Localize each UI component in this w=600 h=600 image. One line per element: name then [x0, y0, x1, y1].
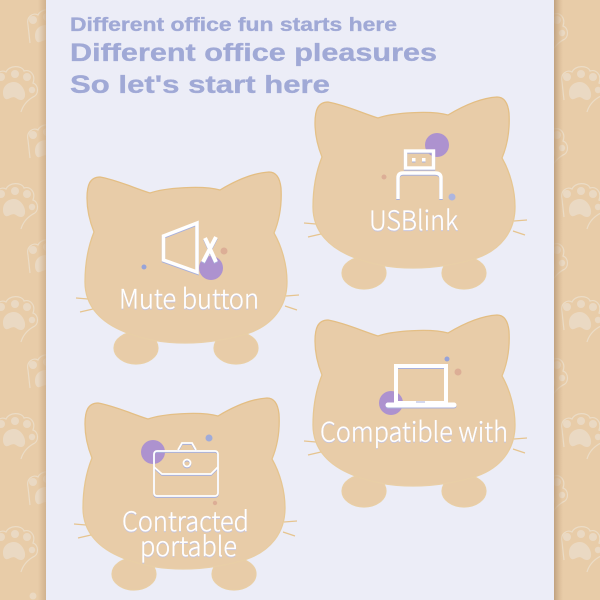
- subtitle line: Different office fun starts here: [70, 15, 397, 36]
- panel: contracted portable cat: [74, 398, 297, 590]
- icon: USB plug: [398, 151, 441, 199]
- decorative dots: [379, 356, 462, 415]
- label second line: portable: [140, 525, 237, 564]
- label: Contracted: [122, 500, 249, 539]
- panel: mute button cat: [76, 172, 299, 364]
- label: Compatible with: [320, 410, 508, 450]
- panel: USB link cat: [304, 97, 527, 289]
- label: Mute button: [119, 278, 259, 316]
- title: [70, 15, 437, 99]
- heading line one: Different office pleasures: [70, 39, 437, 67]
- decorative dots: [141, 434, 217, 505]
- decorative dots: [382, 133, 456, 200]
- icon: muted speaker: [164, 223, 216, 272]
- cat silhouette: [304, 315, 527, 507]
- panel: compatibility cat: [304, 315, 527, 507]
- cat silhouette: [74, 398, 297, 590]
- label: USBlink: [369, 199, 458, 238]
- cat silhouette: [304, 97, 527, 289]
- decorative dots: [142, 248, 228, 280]
- icon: briefcase: [154, 443, 218, 496]
- heading line two: So let's start here: [70, 71, 330, 99]
- icon: laptop: [388, 366, 454, 405]
- cat silhouette: [76, 172, 299, 364]
